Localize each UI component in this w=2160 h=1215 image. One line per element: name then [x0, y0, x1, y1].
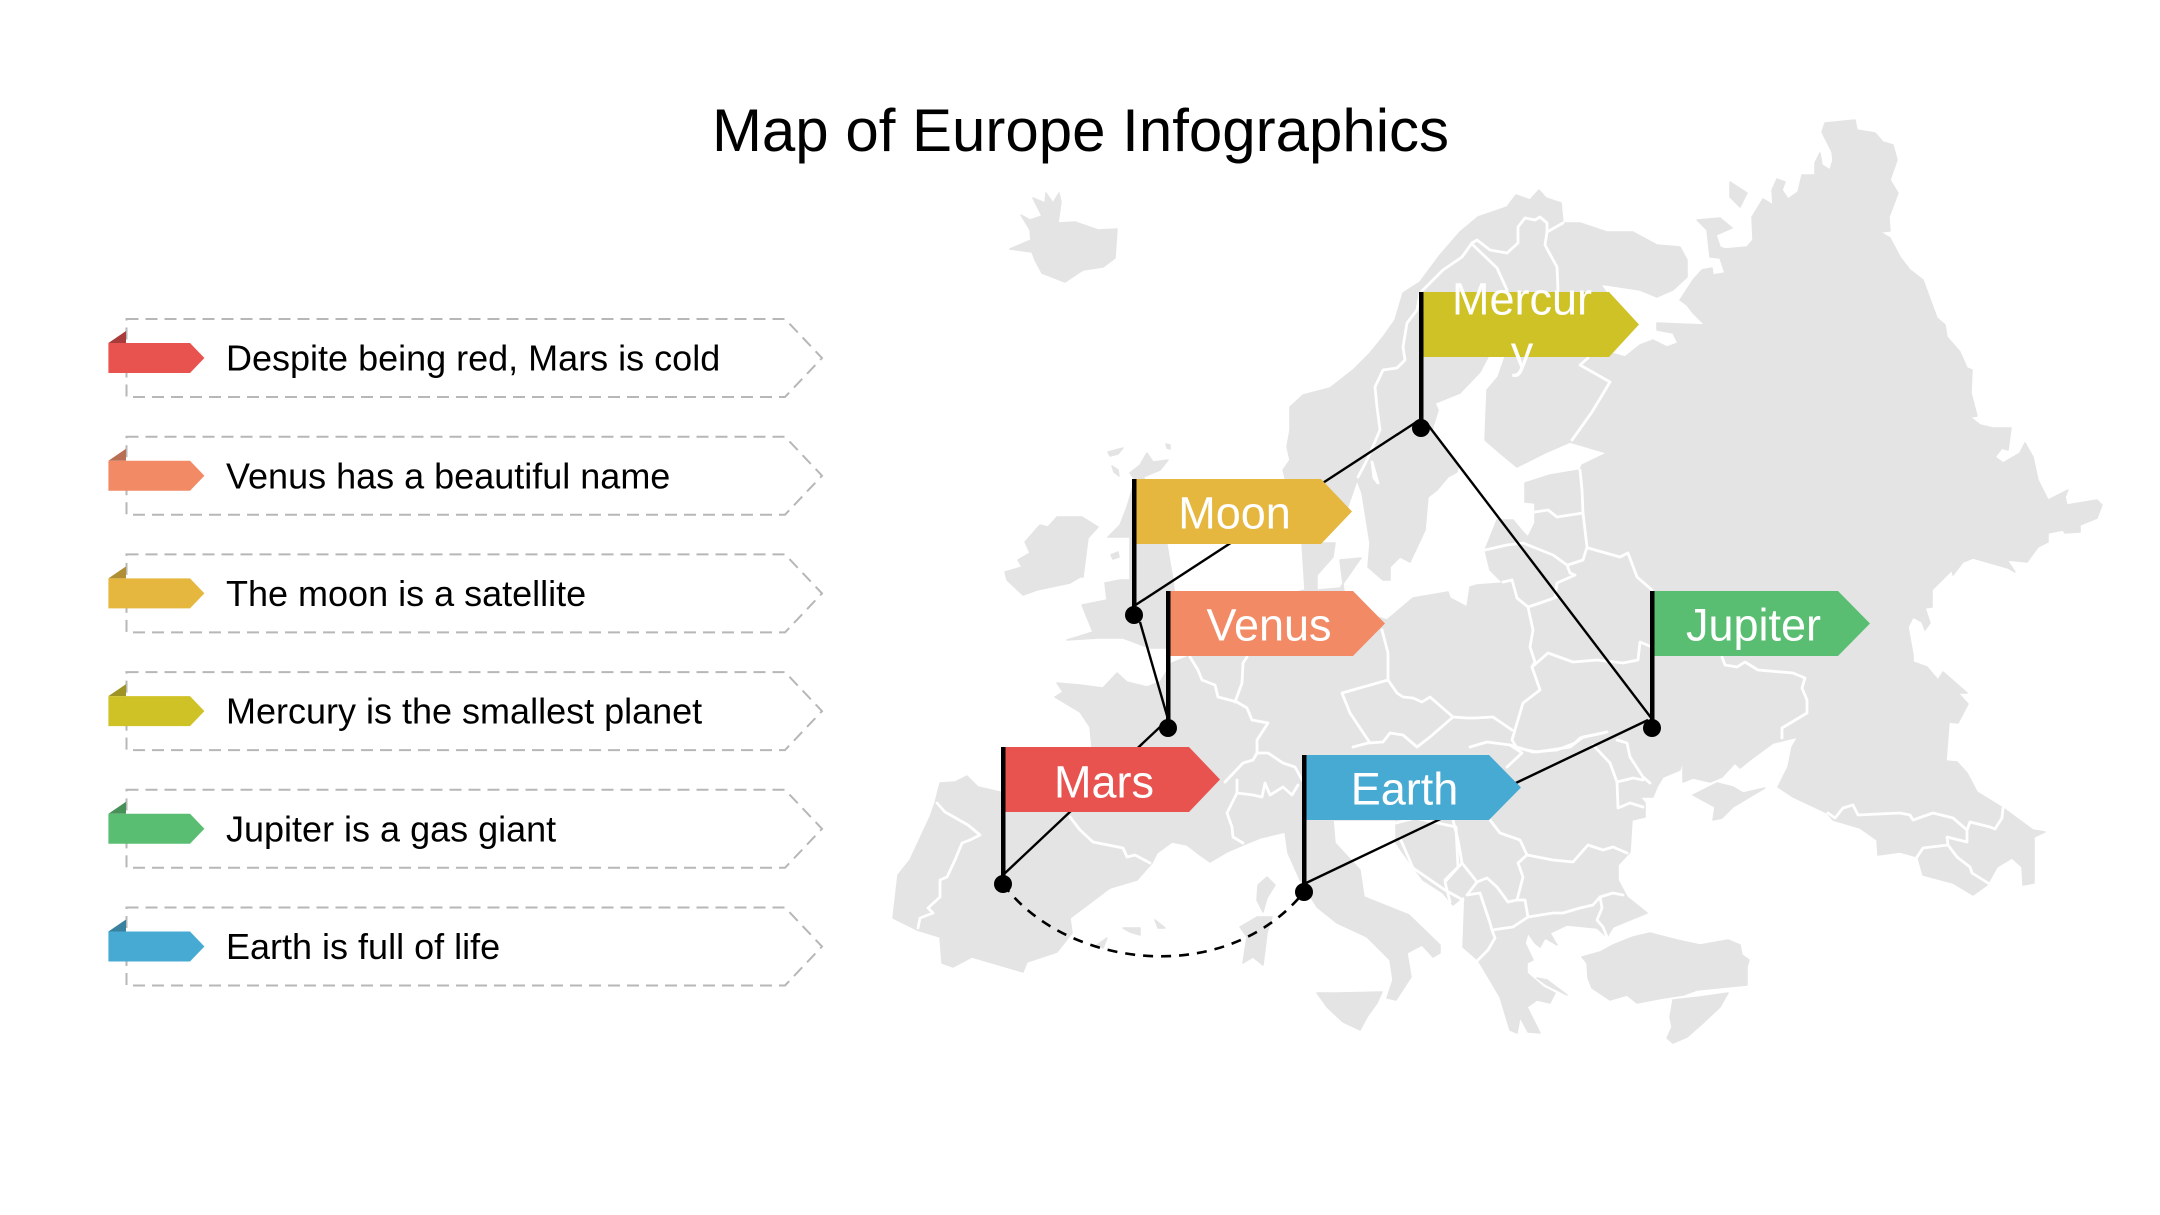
flag: Mars: Mars [1054, 756, 1154, 808]
legend row: Mars [108, 319, 822, 397]
flag: Mars [994, 747, 1220, 893]
legend row: Venus: Venus has a beautiful name [226, 455, 670, 496]
title: Map of Europe Infographics [712, 97, 1449, 164]
flag: Mercury: Mercur [1452, 274, 1592, 324]
legend row: Venus [108, 437, 822, 515]
panel: legend list [108, 319, 822, 986]
flag: Moon: Moon [1178, 488, 1291, 538]
flag: Venus: Venus [1206, 600, 1332, 650]
flag: Mercury: y [1511, 326, 1534, 378]
flag: Earth [1295, 755, 1521, 901]
legend row: Mercury [108, 672, 822, 750]
legend row: Moon [108, 554, 822, 632]
route lines [1003, 419, 1652, 956]
legend row: Mars: Despite being red, Mars is cold [226, 338, 720, 379]
legend row: Earth: Earth is full of life [226, 926, 500, 967]
flag: Mercury [1412, 274, 1639, 437]
flag: Jupiter: Jupiter [1686, 600, 1821, 650]
flag: Jupiter [1643, 591, 1870, 737]
legend row: Mercury: Mercury is the smallest planet [226, 691, 702, 732]
legend row: Moon: The moon is a satellite [226, 573, 586, 614]
legend row: Earth [108, 908, 822, 986]
map of Europe [893, 120, 2102, 1043]
legend row: Jupiter [108, 790, 822, 868]
flag: Earth: Earth [1351, 764, 1458, 814]
flag: Moon [1125, 479, 1352, 624]
legend row: Jupiter: Jupiter is a gas giant [226, 808, 556, 849]
flag: Venus [1159, 591, 1385, 737]
